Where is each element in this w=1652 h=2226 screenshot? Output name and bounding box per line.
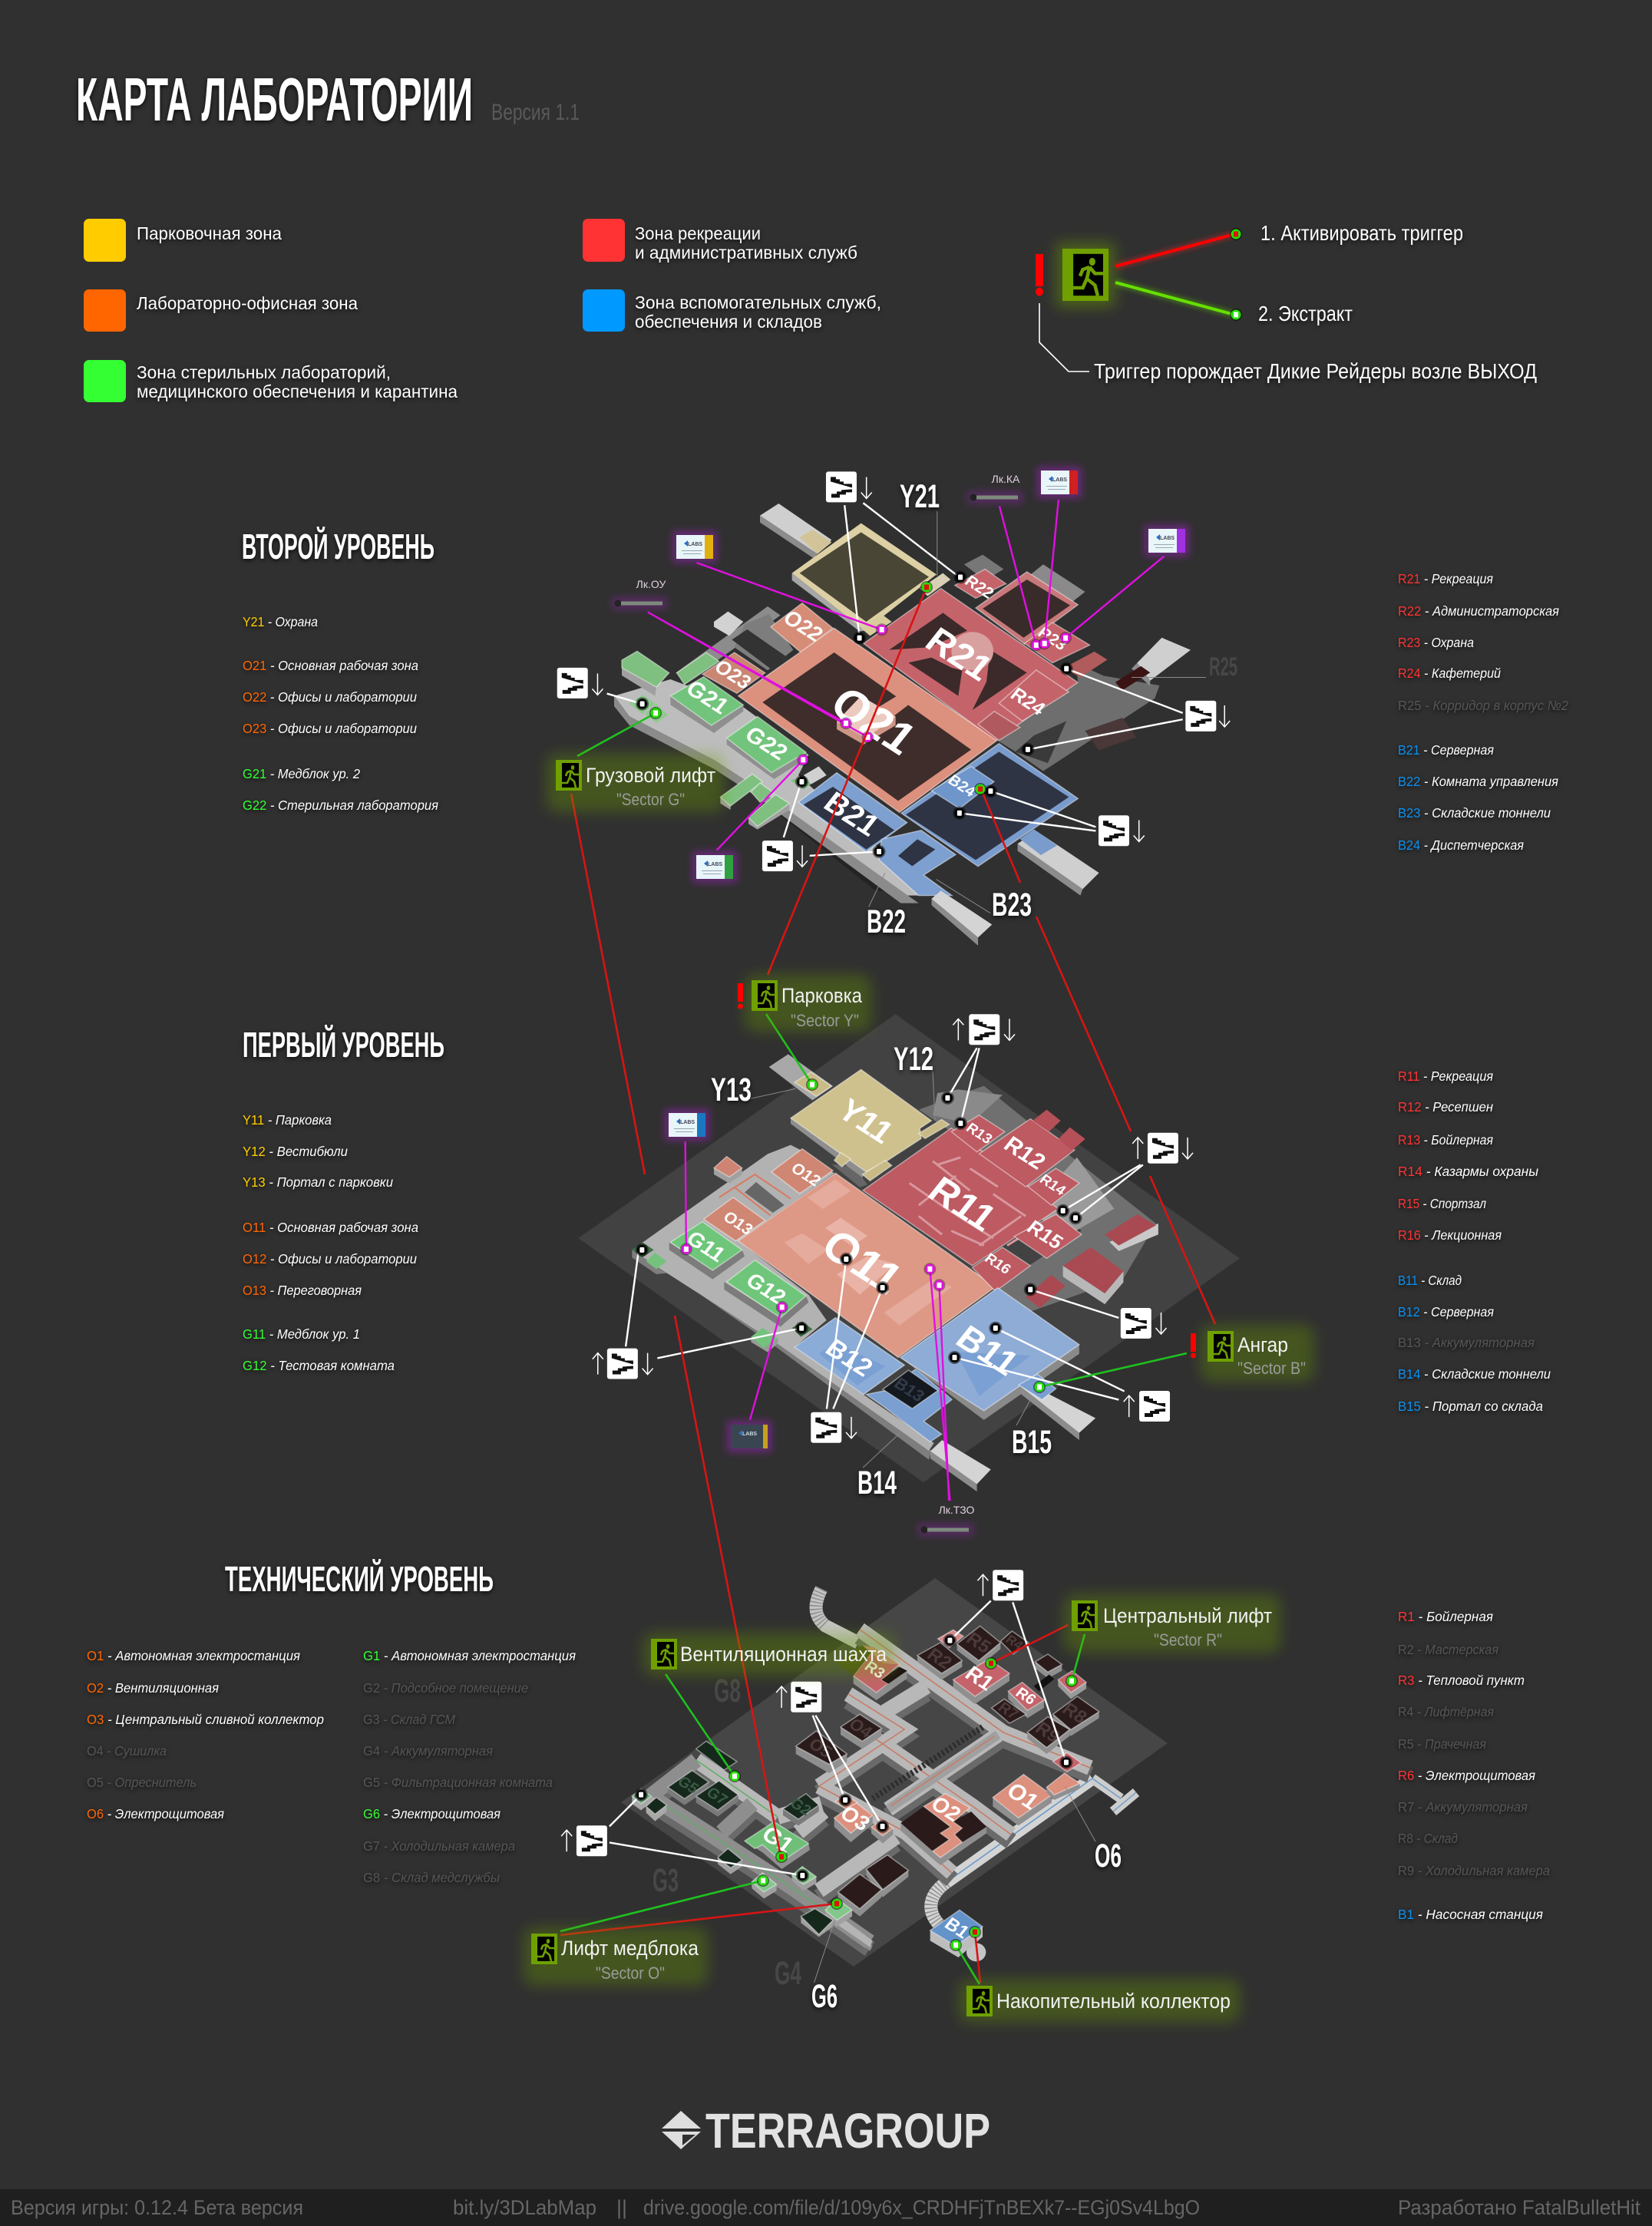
room list: first level right: B13 - Аккумуляторная bbox=[1398, 1335, 1535, 1350]
area labels: Y21 bbox=[900, 478, 940, 515]
room list: technical level column one: O6 - Электрощитовая bbox=[87, 1806, 224, 1821]
room list: second level right bbox=[1398, 571, 1568, 853]
room G11 bbox=[669, 1222, 745, 1280]
room list: first level left: O13 - Переговорная bbox=[243, 1283, 362, 1298]
legend: sterile labs zone: Зона стерильных лабораторий, bbox=[137, 362, 391, 382]
room list: first level left: Y11 - Парковка bbox=[243, 1112, 332, 1128]
other green rooms bbox=[632, 1788, 873, 1951]
room R12: R12 bbox=[999, 1132, 1050, 1174]
leader lines bbox=[626, 1048, 1143, 1501]
room G7: G7 bbox=[703, 1784, 731, 1808]
room list: first level left: O12 - Офисы и лаборатории bbox=[243, 1251, 417, 1267]
room list: second level left: O22 - Офисы и лаборатории bbox=[243, 689, 417, 705]
title: КАРТА ЛАБОРАТОРИИ bbox=[76, 65, 473, 134]
area labels: B22 bbox=[867, 903, 906, 940]
area labels: B23 bbox=[992, 887, 1032, 923]
room B21 bbox=[798, 773, 907, 852]
map: technical level north-east rooms bbox=[837, 1626, 1099, 1961]
trigger note: Триггер порождает Дикие Рейдеры возле ВЫХОД bbox=[1094, 359, 1537, 383]
room B1 pump station bbox=[930, 1910, 986, 1961]
area labels: B15 bbox=[1012, 1424, 1052, 1461]
room B24 bbox=[931, 766, 994, 808]
exit callout: medblock lift: "Sector O" bbox=[596, 1963, 665, 1983]
room list: technical level right: R6 - Электрощитовая bbox=[1398, 1768, 1535, 1783]
room list: technical level column two: G7 - Холодильная камера bbox=[363, 1838, 515, 1854]
room list: second level right: B24 - Диспетчерская bbox=[1398, 837, 1524, 853]
east corridor floors bbox=[964, 555, 1159, 771]
portal bridge B15 bbox=[1019, 1374, 1095, 1440]
room R24 bbox=[978, 670, 1069, 741]
exit callout: ventilation shaft: Вентиляционная шахта bbox=[680, 1643, 887, 1666]
exit callout: cargo lift: Грузовой лифт bbox=[586, 764, 715, 787]
room R15 bbox=[1014, 1214, 1082, 1258]
key: Lk OU: Лк.ОУ bbox=[636, 578, 666, 590]
dim area labels: R25 bbox=[1209, 652, 1237, 682]
room O1 bbox=[993, 1775, 1052, 1825]
trigger and exit markers bbox=[649, 581, 1078, 1951]
area labels: Y12 bbox=[894, 1041, 933, 1078]
exit callout: cargo lift bbox=[547, 754, 725, 812]
room list: technical level column two bbox=[363, 1648, 576, 1885]
card: green area bbox=[692, 851, 737, 883]
legend: recreation zone: Зона рекреации bbox=[635, 223, 761, 243]
area labels bbox=[711, 478, 1122, 2015]
room O2 bbox=[900, 1792, 986, 1865]
legend: recreation zone bbox=[583, 219, 857, 263]
card: blue area bbox=[665, 1109, 709, 1141]
room list: second level left: O23 - Офисы и лаборатории bbox=[243, 721, 417, 736]
icon: exclamation bbox=[1036, 254, 1043, 296]
room O23 bbox=[702, 652, 765, 693]
room list: technical level column two: G1 - Автономная электростанция bbox=[363, 1648, 576, 1663]
exit callout: parking: Парковка bbox=[781, 984, 863, 1007]
room Y11 bbox=[791, 1069, 950, 1181]
room list: technical level right: R8 - Склад bbox=[1398, 1831, 1458, 1846]
room R5: R5 bbox=[962, 1629, 995, 1657]
legend: parking zone: Парковочная зона bbox=[137, 223, 282, 243]
room list: first level right: R12 - Ресепшен bbox=[1398, 1099, 1493, 1115]
key: Lk KA bbox=[967, 473, 1023, 504]
room top pink bbox=[938, 1630, 963, 1648]
leader lines bbox=[610, 1600, 1095, 1983]
room north dark bbox=[976, 572, 1078, 644]
room R3 bbox=[837, 1645, 907, 1700]
room list: technical level column one: O5 - Опреснитель bbox=[87, 1775, 197, 1790]
room O5: O5 bbox=[805, 1734, 836, 1762]
right corridor R25 bbox=[1064, 638, 1191, 690]
exit callout: central lift bbox=[1064, 1594, 1280, 1653]
room G11: G11 bbox=[682, 1227, 730, 1267]
heading: technical level: ТЕХНИЧЕСКИЙ УРОВЕНЬ bbox=[225, 1559, 494, 1599]
room G22: G22 bbox=[740, 722, 792, 765]
room O1: O1 bbox=[1002, 1778, 1043, 1815]
room O12 bbox=[771, 1149, 833, 1194]
room G12 bbox=[724, 1260, 808, 1326]
room R23: R23 bbox=[1034, 624, 1070, 654]
room list: technical level column two: G5 - Фильтрационная комната bbox=[363, 1775, 553, 1790]
exit callout: parking: "Sector Y" bbox=[791, 1011, 859, 1030]
room list: technical level column two: G4 - Аккумуляторная bbox=[363, 1743, 493, 1759]
area labels: Y13 bbox=[711, 1072, 752, 1108]
room R7: R7 bbox=[995, 1699, 1022, 1723]
room R8 bbox=[1053, 1696, 1099, 1736]
room O6 bbox=[1046, 1773, 1080, 1800]
room R21 bbox=[864, 589, 1078, 741]
map: first level east rooms and overlays bbox=[593, 1014, 1193, 1501]
room list: second level right: R22 - Администраторская bbox=[1398, 603, 1559, 619]
exit callout: cargo lift: "Sector G" bbox=[616, 790, 685, 809]
west corridor floor bbox=[632, 1145, 934, 1460]
exit callout: medblock lift bbox=[524, 1927, 708, 1986]
room list: technical level right: R7 - Аккумуляторная bbox=[1398, 1799, 1528, 1815]
card: black card bbox=[727, 1421, 771, 1452]
room B1 pump station: B1 bbox=[940, 1914, 973, 1943]
area labels: G6 bbox=[811, 1978, 838, 2015]
dim area labels bbox=[653, 652, 1237, 1992]
room R13 bbox=[951, 1115, 1005, 1152]
room list: technical level column one: O1 - Автономная электростанция bbox=[87, 1648, 300, 1663]
room B14 bbox=[866, 1369, 952, 1442]
black pipe bbox=[1034, 1675, 1054, 1691]
technical level duct pipes bbox=[816, 1589, 1136, 1924]
room G22 bbox=[727, 716, 806, 779]
right side small rooms bbox=[1026, 1110, 1158, 1308]
exit callout: central lift: Центральный лифт bbox=[1103, 1604, 1272, 1627]
room G2: G2 bbox=[787, 1795, 814, 1819]
legend: parking zone bbox=[84, 219, 282, 262]
room R14: R14 bbox=[1036, 1171, 1069, 1199]
room R22 bbox=[955, 570, 1006, 602]
room list: second level right: R21 - Рекреация bbox=[1398, 571, 1493, 586]
exit callout: parking bbox=[738, 975, 871, 1032]
room O5 bbox=[796, 1731, 847, 1773]
room list: technical level right: R5 - Прачечная bbox=[1398, 1736, 1486, 1752]
icon: exit sign bbox=[1056, 243, 1115, 307]
area labels: O6 bbox=[1095, 1838, 1122, 1874]
room list: second level left: G22 - Стерильная лаборатория bbox=[243, 798, 438, 813]
legend: support zone: обеспечения и складов bbox=[635, 312, 822, 332]
room list: first level left: Y12 - Вестибюли bbox=[243, 1144, 348, 1159]
card: red area: LABS bbox=[1052, 477, 1067, 483]
room list: second level right: B22 - Комната управления bbox=[1398, 774, 1558, 789]
room list: technical level column two: G8 - Склад медслужбы bbox=[363, 1870, 500, 1885]
room list: second level right: B21 - Серверная bbox=[1398, 742, 1494, 758]
room G5: G5 bbox=[674, 1773, 702, 1798]
room list: first level left bbox=[243, 1112, 418, 1373]
card: violet area: LABS bbox=[1160, 536, 1175, 541]
map: second level back structures bbox=[964, 555, 1191, 771]
room list: first level left: Y13 - Портал с парковки bbox=[243, 1174, 393, 1190]
room R11: R11 bbox=[920, 1168, 1005, 1239]
room list: second level left: O21 - Основная рабочая зона bbox=[243, 658, 418, 673]
room R9: R9 bbox=[1031, 1718, 1064, 1747]
keycards and keys bbox=[612, 467, 1189, 1536]
exit callout: ventilation shaft bbox=[643, 1633, 895, 1676]
Terragroup logo bbox=[662, 2103, 990, 2158]
stair markers and stairs icons bbox=[557, 471, 1230, 871]
card: yellow area bbox=[672, 531, 717, 563]
room G7 bbox=[696, 1781, 738, 1817]
logo wordmark: TERRAGROUP bbox=[705, 2103, 990, 2158]
west corridor floor bbox=[614, 606, 944, 903]
room O3: O3 bbox=[836, 1802, 874, 1835]
room list: technical level column two: G3 - Склад ГСМ bbox=[363, 1712, 455, 1727]
room G21: G21 bbox=[681, 675, 733, 719]
room list: technical level column two: G6 - Электрощитовая bbox=[363, 1806, 501, 1821]
room G5 bbox=[668, 1771, 709, 1805]
footer separator: || bbox=[616, 2196, 627, 2219]
room B12 bbox=[795, 1318, 904, 1395]
leader lines bbox=[607, 500, 1206, 913]
room R8: R8 bbox=[1058, 1699, 1091, 1728]
room list: technical level column one bbox=[87, 1648, 324, 1821]
legend: support zone bbox=[583, 289, 881, 332]
room list: first level left: G11 - Медблок ур. 1 bbox=[243, 1326, 360, 1342]
bottom bridge bbox=[930, 1440, 991, 1491]
card: violet area bbox=[1145, 525, 1189, 556]
room G1: G1 bbox=[757, 1821, 798, 1858]
room R16: R16 bbox=[981, 1250, 1014, 1278]
room list: second level right: R23 - Охрана bbox=[1398, 635, 1474, 650]
zone colour legend bbox=[84, 219, 881, 402]
room list: technical level column one: O2 - Вентиляционная bbox=[87, 1680, 219, 1696]
exit callout: medblock lift: Лифт медблока bbox=[561, 1937, 699, 1960]
room R5 bbox=[957, 1626, 1000, 1667]
room O2: O2 bbox=[927, 1792, 966, 1826]
room list: first level right: B12 - Серверная bbox=[1398, 1304, 1494, 1319]
trigger line bbox=[1115, 228, 1242, 266]
extract line bbox=[1115, 282, 1242, 321]
room O21: O21 bbox=[821, 677, 926, 764]
room G1 bbox=[745, 1821, 810, 1869]
stair markers and stairs icons bbox=[561, 1570, 1072, 1882]
card: blue area: LABS bbox=[680, 1120, 695, 1125]
room B11 bbox=[900, 1288, 1079, 1420]
map: second level main rooms bbox=[614, 504, 1078, 903]
south lift R room bbox=[1053, 1752, 1081, 1772]
floor connection red lines bbox=[560, 587, 1215, 1983]
room R2 bbox=[917, 1643, 962, 1679]
room list: first level right: R11 - Рекреация bbox=[1398, 1068, 1493, 1084]
room Y21 bbox=[792, 523, 950, 636]
key: Lk TZO: Лк.ТЗО bbox=[939, 1504, 974, 1516]
drop shadow under level bbox=[655, 704, 947, 898]
legend: support zone: Зона вспомогательных служб, bbox=[635, 292, 881, 312]
exit callout: collector bbox=[959, 1980, 1240, 2023]
room B11: B11 bbox=[949, 1317, 1026, 1382]
heading: second level: ВТОРОЙ УРОВЕНЬ bbox=[242, 527, 434, 566]
green side rooms bbox=[622, 651, 827, 830]
dark platform bbox=[578, 1014, 1240, 1482]
footer version text: Версия игры: 0.12.4 Бета версия bbox=[11, 2196, 303, 2219]
room O11: O11 bbox=[812, 1220, 911, 1303]
room R4: R4 bbox=[1003, 1632, 1026, 1653]
top left portal bridge bbox=[760, 504, 831, 558]
room list: first level right: B15 - Портал со склада bbox=[1398, 1399, 1543, 1414]
room B13 bbox=[883, 1370, 938, 1409]
room B22 bbox=[879, 831, 956, 896]
room list: technical level right bbox=[1398, 1609, 1550, 1922]
room list: technical level right: R1 - Бойлерная bbox=[1398, 1609, 1493, 1624]
room list: first level right bbox=[1398, 1068, 1551, 1414]
green small rooms bbox=[632, 1242, 812, 1352]
room R21: R21 bbox=[918, 620, 1000, 689]
room list: second level left: G21 - Медблок ур. 2 bbox=[243, 766, 360, 781]
room R13: R13 bbox=[963, 1121, 995, 1148]
key: Lk OU bbox=[612, 578, 667, 609]
legend: lab office zone bbox=[84, 289, 358, 332]
room list: technical level right: R2 - Мастерская bbox=[1398, 1642, 1498, 1657]
card: green area: LABS bbox=[708, 862, 722, 867]
room O13: O13 bbox=[720, 1208, 756, 1238]
room list: technical level column one: O3 - Центральный сливной коллектор bbox=[87, 1712, 324, 1727]
room R1: R1 bbox=[961, 1662, 999, 1695]
extract green lines bbox=[560, 713, 1187, 1984]
bottom bridge bbox=[931, 890, 992, 946]
room list: second level right: R25 - Корридор в корпус №2 bbox=[1398, 698, 1568, 713]
room list: first level left: O11 - Основная рабочая зона bbox=[243, 1220, 418, 1235]
room R6: R6 bbox=[1012, 1685, 1039, 1709]
dim area labels: G4 bbox=[775, 1955, 801, 1992]
room R9 bbox=[1027, 1717, 1069, 1754]
room R15: R15 bbox=[1023, 1217, 1067, 1253]
room list: technical level right: R3 - Тепловой пункт bbox=[1398, 1673, 1525, 1688]
room O4 bbox=[841, 1714, 881, 1749]
room G2 bbox=[783, 1794, 819, 1825]
exit key diagram bbox=[1036, 221, 1537, 383]
room list: first level right: R14 - Казармы охраны bbox=[1398, 1164, 1538, 1179]
key: Lk KA: Лк.КА bbox=[992, 473, 1020, 485]
key: Lk TZO bbox=[918, 1504, 974, 1536]
portal bridge Y13 bbox=[769, 1054, 833, 1100]
room O23: O23 bbox=[710, 656, 755, 693]
room list: second level right: B23 - Складские тоннели bbox=[1398, 805, 1551, 821]
room list: second level right: R24 - Кафетерий bbox=[1398, 665, 1501, 681]
room B13: B13 bbox=[890, 1374, 928, 1405]
room list: first level right: B14 - Складские тоннели bbox=[1398, 1366, 1551, 1382]
room B24: B24 bbox=[944, 772, 979, 801]
room R14 bbox=[1028, 1168, 1079, 1205]
room R23 bbox=[1025, 623, 1089, 663]
exit callout: central lift: "Sector R" bbox=[1154, 1630, 1222, 1650]
step two text: 2. Экстракт bbox=[1258, 302, 1353, 325]
map: first level back structures bbox=[578, 1014, 1240, 1482]
room list: technical level right: B1 - Насосная станция bbox=[1398, 1907, 1543, 1922]
footer bar bbox=[0, 2189, 1652, 2226]
area labels: B14 bbox=[857, 1465, 897, 1501]
room O3 bbox=[834, 1795, 893, 1844]
room list: technical level right: R9 - Холодильная камера bbox=[1398, 1863, 1550, 1878]
room list: second level left: Y21 - Охрана bbox=[243, 614, 318, 629]
room R2: R2 bbox=[923, 1644, 956, 1673]
small dark room bbox=[1035, 1654, 1062, 1679]
room Y11: Y11 bbox=[831, 1092, 900, 1150]
stair markers and stairs icons bbox=[593, 1014, 1193, 1443]
card: black card: LABS bbox=[742, 1432, 757, 1437]
exit callout: hangar: "Sector B" bbox=[1237, 1359, 1306, 1378]
room O11 bbox=[738, 1173, 996, 1357]
map: technical level platform bbox=[621, 1578, 1168, 1967]
room O13 bbox=[704, 1197, 765, 1241]
room list: technical level column one: O4 - Сушилка bbox=[87, 1743, 167, 1759]
exit callout: hangar: Ангар bbox=[1237, 1333, 1288, 1356]
room list: first level right: R15 - Спортзал bbox=[1398, 1196, 1486, 1211]
legend: recreation zone: и административных служб bbox=[635, 243, 857, 263]
version note: Версия 1.1 bbox=[491, 100, 580, 125]
exit callout: hangar bbox=[1191, 1325, 1314, 1382]
room O22: O22 bbox=[779, 606, 828, 646]
room list: technical level column two: G2 - Подсобное помещение bbox=[363, 1680, 528, 1696]
heading: first level: ПЕРВЫЙ УРОВЕНЬ bbox=[243, 1025, 444, 1065]
room O22 bbox=[771, 603, 833, 652]
legend: sterile labs zone bbox=[84, 360, 458, 402]
room B23 bbox=[901, 744, 1078, 867]
map: first level main rooms bbox=[632, 1054, 996, 1460]
room list: technical level right: R4 - Лифтёрная bbox=[1398, 1704, 1494, 1719]
room list: first level right: B11 - Склад bbox=[1398, 1273, 1462, 1288]
room R12 bbox=[980, 1119, 1075, 1187]
room R3: R3 bbox=[861, 1658, 888, 1682]
step one text: 1. Активировать триггер bbox=[1260, 221, 1463, 245]
room list: first level right: R16 - Лекционная bbox=[1398, 1227, 1502, 1243]
footer short link: bit.ly/3DLabMap bbox=[453, 2196, 596, 2219]
room B21: B21 bbox=[818, 786, 886, 843]
footer drive link: drive.google.com/file/d/109y6x_CRDHFjTnBEXk7--EGj0Sv4LbgO bbox=[643, 2196, 1200, 2219]
east corridors bbox=[919, 1086, 1156, 1312]
room G12: G12 bbox=[742, 1268, 791, 1309]
exit callout: collector: Накопительный коллектор bbox=[996, 1990, 1231, 2013]
trigger leader bbox=[1039, 303, 1089, 372]
card: yellow area: LABS bbox=[688, 542, 702, 547]
bottom right portal bridge bbox=[1018, 829, 1099, 896]
room O4: O4 bbox=[845, 1714, 877, 1742]
room list: first level right: R13 - Бойлерная bbox=[1398, 1132, 1493, 1148]
map: technical level overlays bbox=[561, 1570, 1095, 1983]
lower dark rooms bbox=[838, 1855, 908, 1917]
room B12: B12 bbox=[820, 1333, 878, 1382]
room R1 bbox=[953, 1660, 1009, 1704]
room O12: O12 bbox=[788, 1160, 824, 1190]
card: red area bbox=[1037, 467, 1082, 498]
room G21 bbox=[670, 675, 743, 733]
footer author: Разработано FatalBulletHit bbox=[1398, 2196, 1640, 2219]
map: second level east rooms and overlays bbox=[557, 471, 1230, 946]
room R16 bbox=[973, 1247, 1030, 1291]
logo mark bbox=[662, 2111, 701, 2149]
technical level corridors bbox=[650, 1607, 1090, 1949]
room list: second level left bbox=[243, 614, 438, 813]
room G8 bbox=[696, 1741, 737, 1770]
lift R room bbox=[1058, 1671, 1086, 1699]
room R11 bbox=[863, 1128, 1059, 1266]
legend: lab office zone: Лабораторно-офисная зона bbox=[137, 293, 358, 313]
room O21 bbox=[738, 628, 996, 812]
room R6 bbox=[1008, 1683, 1044, 1718]
room list: first level left: G12 - Тестовая комната bbox=[243, 1358, 395, 1373]
dim area labels: G8 bbox=[714, 1673, 741, 1709]
room R22: R22 bbox=[961, 573, 997, 602]
map: technical level south-west rooms bbox=[632, 1714, 893, 1951]
dim area labels: G3 bbox=[653, 1862, 679, 1899]
legend: sterile labs zone: медицинского обеспечения и карантина bbox=[137, 381, 458, 401]
room R24: R24 bbox=[1006, 684, 1049, 719]
